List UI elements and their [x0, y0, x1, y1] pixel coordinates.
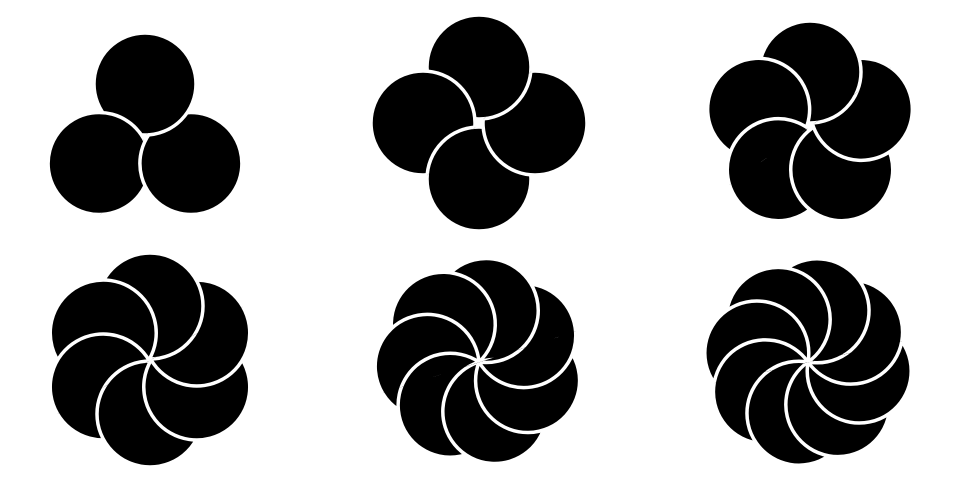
rosette: 6 circles — [52, 254, 248, 466]
rosette: 7 circles — [376, 260, 578, 462]
rosette: 4 circles — [372, 16, 586, 230]
rosette: 5 circles — [709, 22, 911, 219]
rosette: 8 circles — [706, 260, 910, 464]
rosette: 3 circles — [50, 34, 240, 214]
